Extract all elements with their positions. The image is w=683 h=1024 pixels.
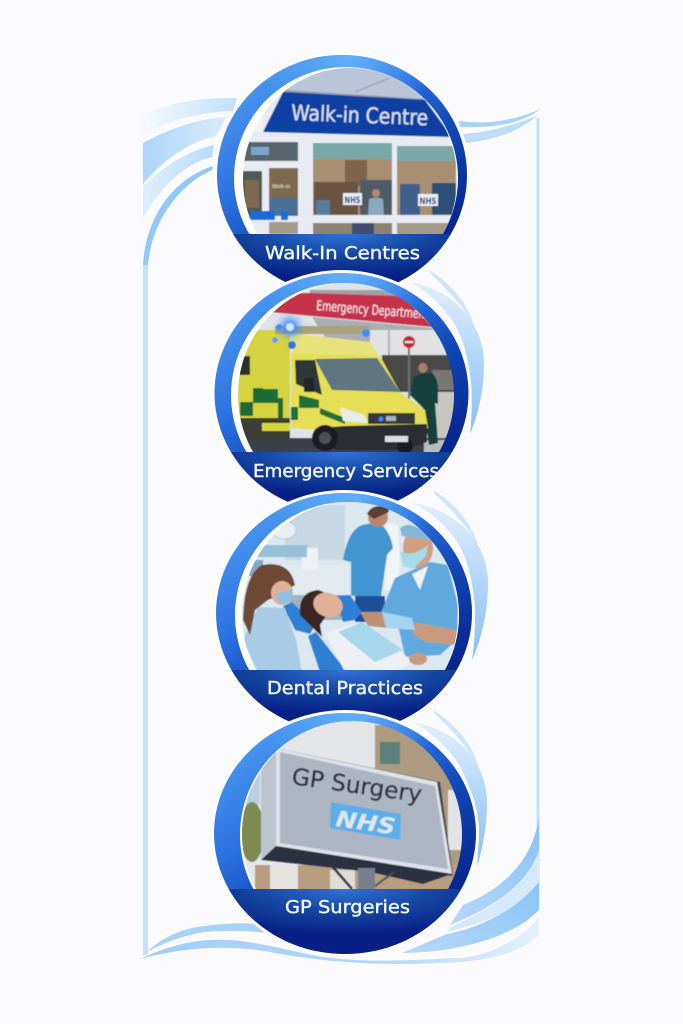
sign text: Walk-in Centre — [291, 101, 429, 131]
NHS logo — [330, 802, 401, 840]
label: Dental Practices — [267, 678, 423, 699]
photo: GP surgery sign: NHS — [334, 807, 397, 840]
band: GP Surgeries — [228, 889, 462, 954]
photo: walk-in centre storefront: NHS — [344, 196, 360, 206]
sign text: Emergency Department — [316, 298, 429, 323]
band: Emergency Services — [231, 452, 452, 502]
label: Walk-In Centres — [265, 243, 420, 264]
band: Dental Practices — [232, 670, 456, 722]
circle: GP Surgeries — [210, 710, 480, 957]
circle: Walk-In Centres — [217, 55, 467, 282]
photo: walk-in centre storefront: Walk-in — [272, 184, 290, 190]
label: Emergency Services — [253, 461, 439, 482]
photo: dental treatment room — [236, 500, 466, 672]
frame and swoosh background — [140, 98, 541, 964]
label: GP Surgeries — [285, 897, 410, 918]
photo: walk-in centre storefront — [236, 60, 460, 235]
photo: GP surgery sign — [240, 720, 465, 892]
photo: ambulance at emergency department — [230, 280, 460, 454]
photo: walk-in centre storefront: NHS — [420, 197, 436, 207]
circle: Emergency Services — [210, 270, 474, 516]
circle: Dental Practices — [210, 490, 480, 736]
sign text: GP Surgery — [290, 764, 424, 808]
band: Walk-In Centres — [233, 234, 451, 282]
